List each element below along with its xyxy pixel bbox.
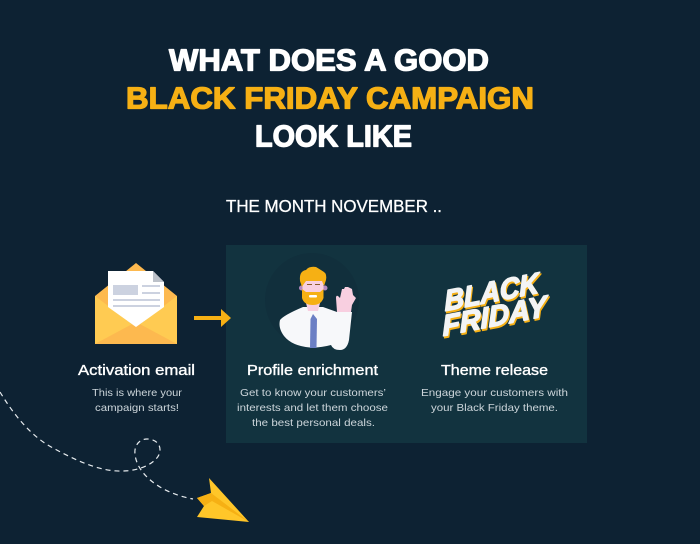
title: WHAT DOES A GOOD (169, 42, 489, 78)
title (126, 42, 534, 154)
text: theme release description: your Black Friday theme. (431, 402, 558, 414)
icon: Black Friday logo: FRIDAY (442, 290, 550, 343)
icon: Black Friday logo: BLACK (445, 269, 542, 320)
heading: theme release: Theme release (441, 363, 548, 379)
text: profile enrichment description: interests and let them choose (237, 402, 388, 414)
subtitle: THE MONTH NOVEMBER .. (226, 196, 442, 216)
arrow (194, 309, 231, 327)
text: activation email description: This is where your (92, 387, 183, 399)
icon: waving man (265, 253, 359, 350)
text: activation email description: campaign starts! (95, 402, 179, 414)
dashed flight path (0, 392, 193, 499)
text: profile enrichment description: Get to know your customers’ (240, 387, 386, 399)
icon: Black Friday logo: FRIDAY (443, 292, 551, 345)
heading: profile enrichment: Profile enrichment (247, 363, 378, 379)
title: BLACK FRIDAY CAMPAIGN (126, 80, 534, 116)
icon: Black Friday logo: BLACK (444, 267, 541, 318)
heading: activation email: Activation email (78, 363, 195, 379)
text: profile enrichment description (237, 387, 388, 429)
title: LOOK LIKE (255, 118, 412, 154)
text: activation email description (92, 387, 183, 414)
text: profile enrichment description: the best personal deals. (252, 417, 375, 429)
icon: open envelope (95, 263, 177, 344)
icon: Black Friday logo (442, 267, 551, 345)
text: theme release description: Engage your customers with (421, 387, 568, 399)
panel: highlighted steps (226, 245, 587, 443)
text: theme release description (421, 387, 568, 414)
icon: paper plane (197, 478, 249, 522)
